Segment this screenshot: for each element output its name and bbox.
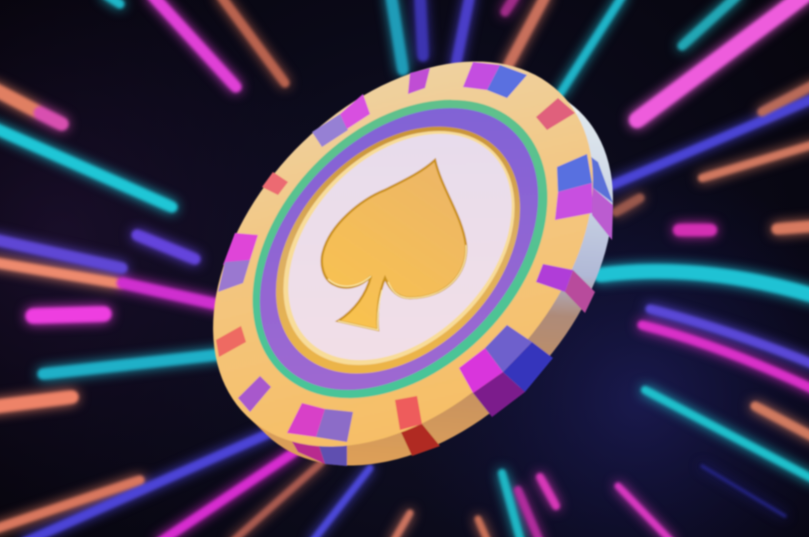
green ring bbox=[194, 42, 606, 456]
purple ring bbox=[205, 54, 593, 444]
streaks: upper right bbox=[391, 0, 806, 120]
streaks: upper left bbox=[0, 0, 285, 207]
chip face bbox=[139, 0, 667, 520]
center disc bbox=[238, 86, 560, 410]
side edge stripes bbox=[287, 154, 613, 466]
face edge stripes bbox=[216, 62, 592, 442]
gold ring bbox=[227, 78, 569, 422]
streaks: left bbox=[0, 235, 225, 407]
poker chip bbox=[139, 0, 687, 537]
streaks: right bbox=[600, 84, 809, 516]
icon: gold spade bbox=[322, 160, 466, 330]
chip side edge bbox=[159, 7, 687, 537]
streaks: bottom bbox=[0, 432, 672, 537]
